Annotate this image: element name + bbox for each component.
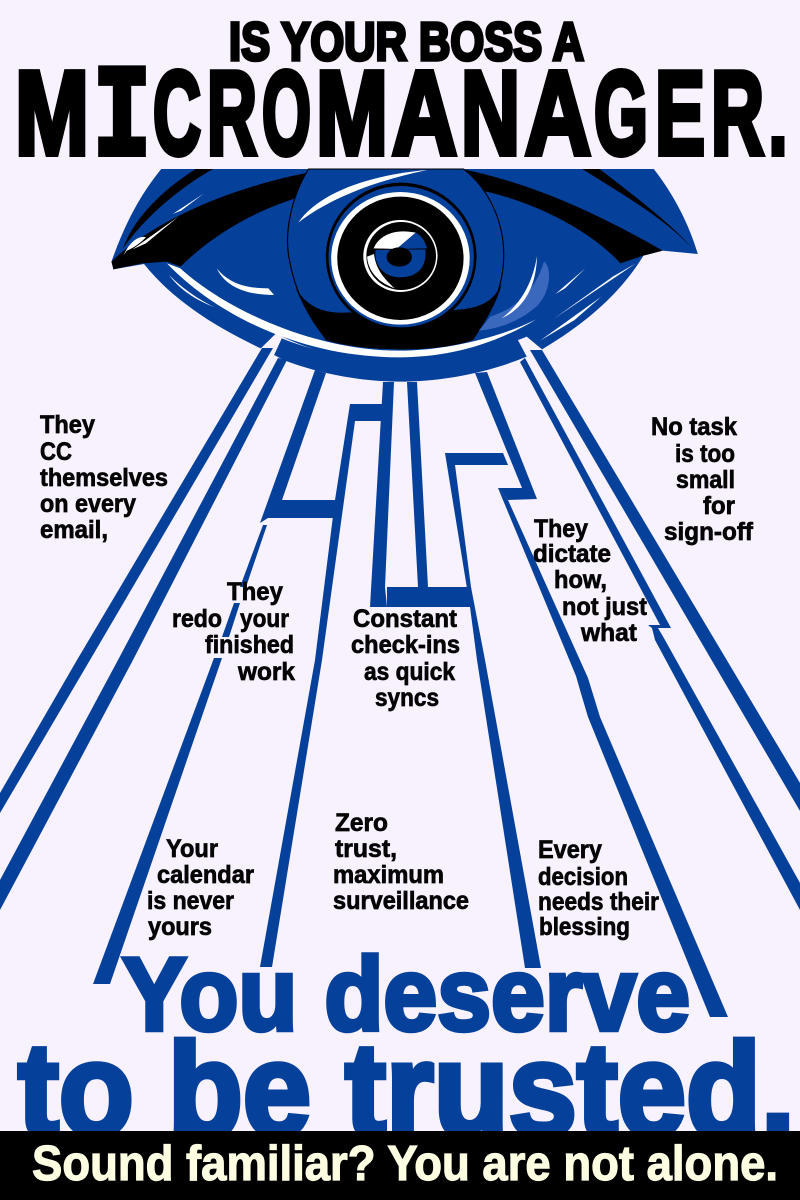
text: they redo your finished work: your	[240, 605, 289, 633]
footer bar	[0, 1131, 800, 1200]
text: they dictate how	[533, 515, 648, 647]
eye highlights	[124, 170, 636, 341]
text: constant check-ins: as quick	[364, 658, 455, 686]
title: is your boss a: IS YOUR BOSS A	[229, 12, 584, 72]
title: micromanager: M	[316, 47, 388, 180]
title: micromanager: A	[525, 47, 591, 180]
text: they dictate how: not just	[562, 593, 648, 621]
text: zero trust: maximum	[333, 861, 444, 889]
text: they cc themselves: CC	[40, 438, 72, 466]
text: every decision: decision	[538, 863, 628, 891]
text: every decision: needs their	[538, 888, 659, 916]
text: they redo your finished work: finished	[205, 631, 294, 659]
text: no task is too small	[651, 413, 754, 546]
text: zero trust: Zero	[335, 809, 388, 837]
text: they dictate how: They	[534, 515, 588, 543]
text: your calendar: Your	[166, 835, 218, 863]
text: constant check-ins: check-ins	[351, 631, 460, 659]
text: every decision: Every	[538, 836, 602, 864]
text: they cc themselves	[40, 411, 168, 544]
text: they dictate how: how,	[554, 566, 607, 594]
text: they cc themselves: email,	[40, 516, 108, 544]
text: they cc themselves: on every	[40, 490, 136, 518]
title: micromanager: .	[769, 64, 787, 176]
text: your calendar: calendar	[157, 861, 254, 889]
title: micromanager: M	[15, 47, 89, 180]
text: no task is too small: small	[676, 466, 735, 494]
text: they redo your finished work: They	[227, 578, 283, 606]
rays from the eye	[0, 348, 800, 1017]
text: they redo your finished work	[172, 578, 295, 686]
text: constant check-ins: Constant	[353, 605, 458, 633]
text: they dictate how: what	[580, 619, 638, 647]
title: micromanager: C	[153, 47, 201, 180]
title: micromanager: O	[262, 47, 311, 180]
text: zero trust: trust,	[335, 835, 397, 863]
icon: all-seeing eye	[111, 169, 698, 382]
text: every decision	[538, 836, 659, 941]
text: your calendar: is never	[147, 887, 234, 915]
title: micromanager: R	[207, 47, 257, 180]
title: micromanager: G	[594, 47, 648, 180]
text: every decision: blessing	[539, 913, 630, 941]
text: they dictate how: dictate	[533, 540, 611, 568]
title: micromanager: I	[93, 47, 151, 194]
text: they cc themselves: themselves	[40, 464, 168, 492]
text: no task is too small: is too	[675, 440, 735, 468]
text: zero trust: surveillance	[333, 887, 469, 915]
iris	[326, 183, 477, 331]
title: micromanager: R	[711, 47, 764, 180]
text: they cc themselves: They	[40, 411, 95, 439]
text: no task is too small: for	[703, 492, 735, 520]
text: they redo your finished work: work	[237, 658, 295, 686]
text: your calendar	[147, 835, 254, 941]
text: zero trust	[333, 809, 469, 915]
text: your calendar: yours	[148, 913, 212, 941]
text: constant check-ins: syncs	[375, 684, 439, 712]
text: no task is too small: No task	[651, 413, 737, 441]
title: micromanager: E	[655, 47, 705, 180]
text: no task is too small: sign-off	[664, 518, 754, 546]
headline: you deserve: You deserve	[122, 937, 690, 1053]
title: micromanager: A	[392, 47, 457, 180]
text: constant check-ins	[351, 605, 460, 712]
title: micromanager: N	[461, 47, 520, 180]
text: they redo your finished work: redo	[172, 605, 222, 633]
